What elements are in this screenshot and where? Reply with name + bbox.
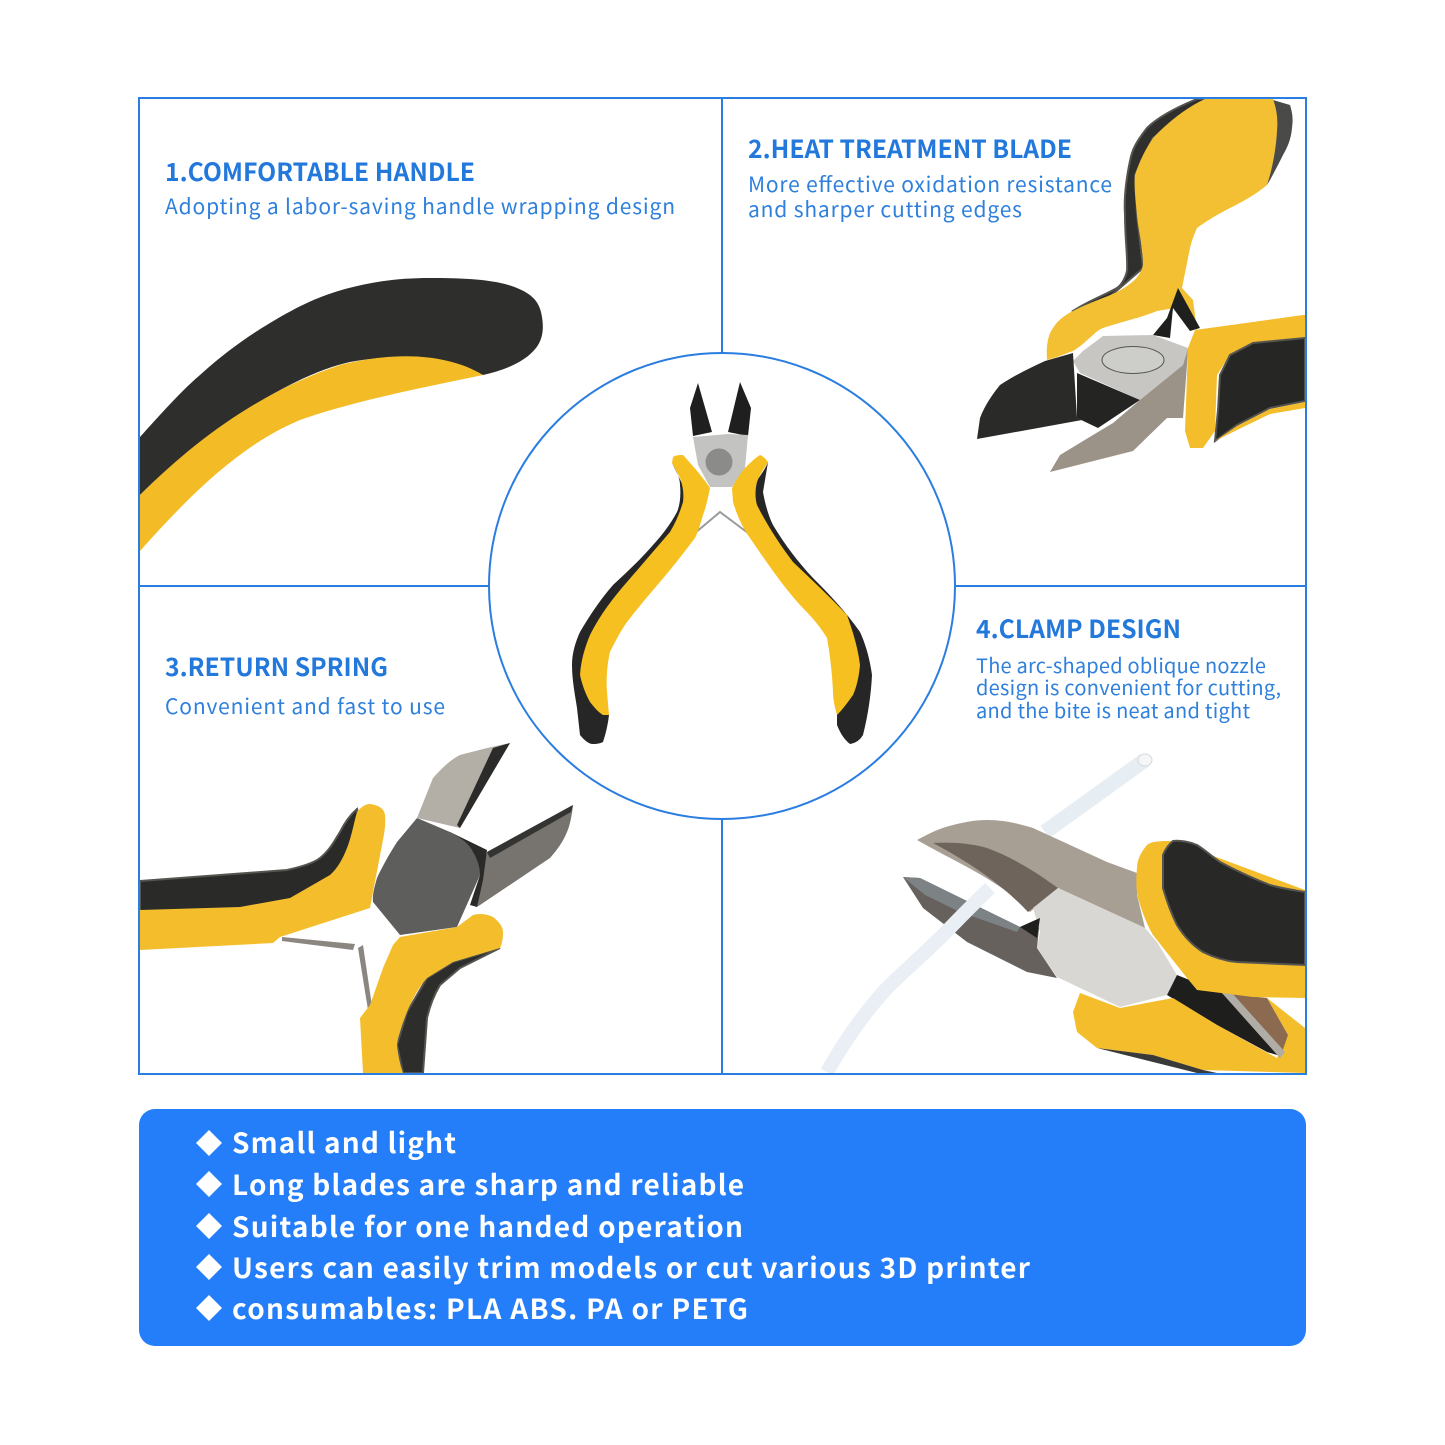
panel: return spring: [140, 648, 573, 1073]
description: heat treatment blade: More effective oxidation resistance: [748, 169, 1112, 199]
image: pliers cutting filament: [827, 754, 1305, 1073]
image: handle close-up: [140, 278, 543, 551]
feature grid frame: [139, 98, 1306, 1074]
bullet: small and light: Small and light: [232, 1122, 456, 1162]
feature bar: [139, 1109, 1306, 1346]
bullet: one handed: Suitable for one handed operation: [232, 1206, 743, 1246]
panel: heat treatment blade: [748, 99, 1305, 472]
image: pliers spring view: [140, 743, 573, 1073]
panel: comfortable handle: [140, 153, 675, 551]
description: clamp design: [976, 656, 1280, 723]
image: full pliers: [572, 382, 872, 744]
heading: return spring: 3.RETURN SPRING: [165, 648, 388, 684]
circle: centre pliers: [489, 353, 955, 819]
description: clamp design: The arc-shaped oblique nozzle: [976, 650, 1266, 679]
heading: heat treatment blade: 2.HEAT TREATMENT BLADE: [748, 130, 1072, 166]
panel: clamp design: [827, 610, 1305, 1073]
bullet: trim models: Users can easily trim models or cut various 3D printer: [232, 1247, 1031, 1287]
heading: clamp design: 4.CLAMP DESIGN: [976, 610, 1181, 646]
description: heat treatment blade: [749, 175, 1112, 222]
image: pliers blade view: [977, 99, 1305, 472]
bullet: consumables: consumables: PLA ABS. PA or PETG: [232, 1288, 748, 1328]
description: comfortable handle: Adopting a labor-saving handle wrapping design: [165, 191, 675, 221]
description: clamp design: design is convenient for cutting,: [976, 672, 1281, 701]
description: clamp design: and the bite is neat and tight: [976, 695, 1250, 724]
description: return spring: Convenient and fast to use: [165, 691, 445, 721]
bullet: long blades: Long blades are sharp and reliable: [232, 1164, 744, 1204]
heading: comfortable handle: 1.COMFORTABLE HANDLE: [165, 153, 475, 189]
description: heat treatment blade: and sharper cutting edges: [748, 194, 1022, 224]
